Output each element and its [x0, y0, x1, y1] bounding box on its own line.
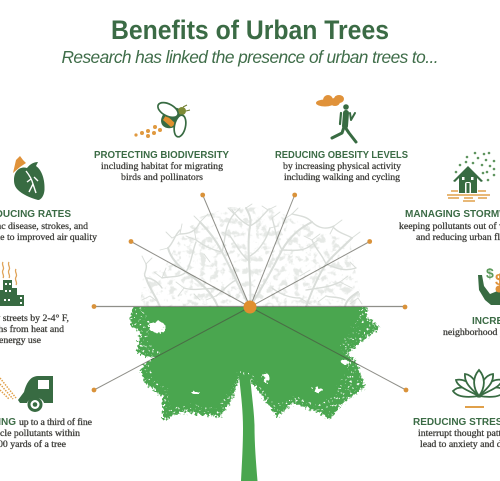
text block: increasing property values [443, 316, 500, 338]
text block: reducing obesity levels: REDUCING OBESITY LEVELS [275, 150, 408, 161]
text block: filtering pollutants [0, 417, 93, 450]
text block: managing stormwater [399, 209, 500, 243]
text block: cooling streets [0, 313, 69, 346]
icon: heart with bird [13, 156, 45, 200]
tree illustration [130, 204, 380, 481]
solid core of foliage [142, 300, 360, 408]
title: Benefits of Urban Trees [111, 15, 389, 45]
text block: reducing obesity levels: including walking and cycling [284, 172, 400, 183]
text block: protecting biodiversity: PROTECTING BIODIVERSITY [94, 150, 229, 161]
leafy canopy, lower half [130, 300, 380, 420]
text block: protecting biodiversity: including habitat for migrating [101, 161, 223, 172]
bare winter branches, upper half [140, 204, 362, 307]
text block: reducing stress [413, 417, 500, 450]
text block: protecting biodiversity [94, 150, 229, 183]
icon: runner under cloud [316, 95, 356, 142]
icon: hand with money: $ [486, 265, 494, 281]
subtitle: Research has linked the presence of urban trees to... [62, 47, 438, 67]
icon: bee [134, 100, 190, 138]
icon: lotus [453, 370, 500, 407]
center hub dot [244, 300, 256, 314]
text block: protecting biodiversity: birds and pollinators [121, 172, 203, 183]
text block: filtering pollutants: up to a third of fine [19, 417, 93, 428]
gaps in foliage [149, 321, 349, 395]
text block: reducing rates [0, 209, 97, 243]
trunk [239, 376, 258, 481]
connector end dots [92, 193, 408, 392]
connector lines [94, 195, 406, 390]
icon: hand with money [478, 265, 500, 305]
icon: factory and heat squiggles [0, 262, 24, 306]
text block: reducing obesity levels: by increasing physical activity [283, 161, 401, 172]
icon: truck with particles [0, 376, 53, 412]
text block: reducing obesity levels [275, 150, 408, 183]
icon: house with rain [447, 152, 495, 201]
